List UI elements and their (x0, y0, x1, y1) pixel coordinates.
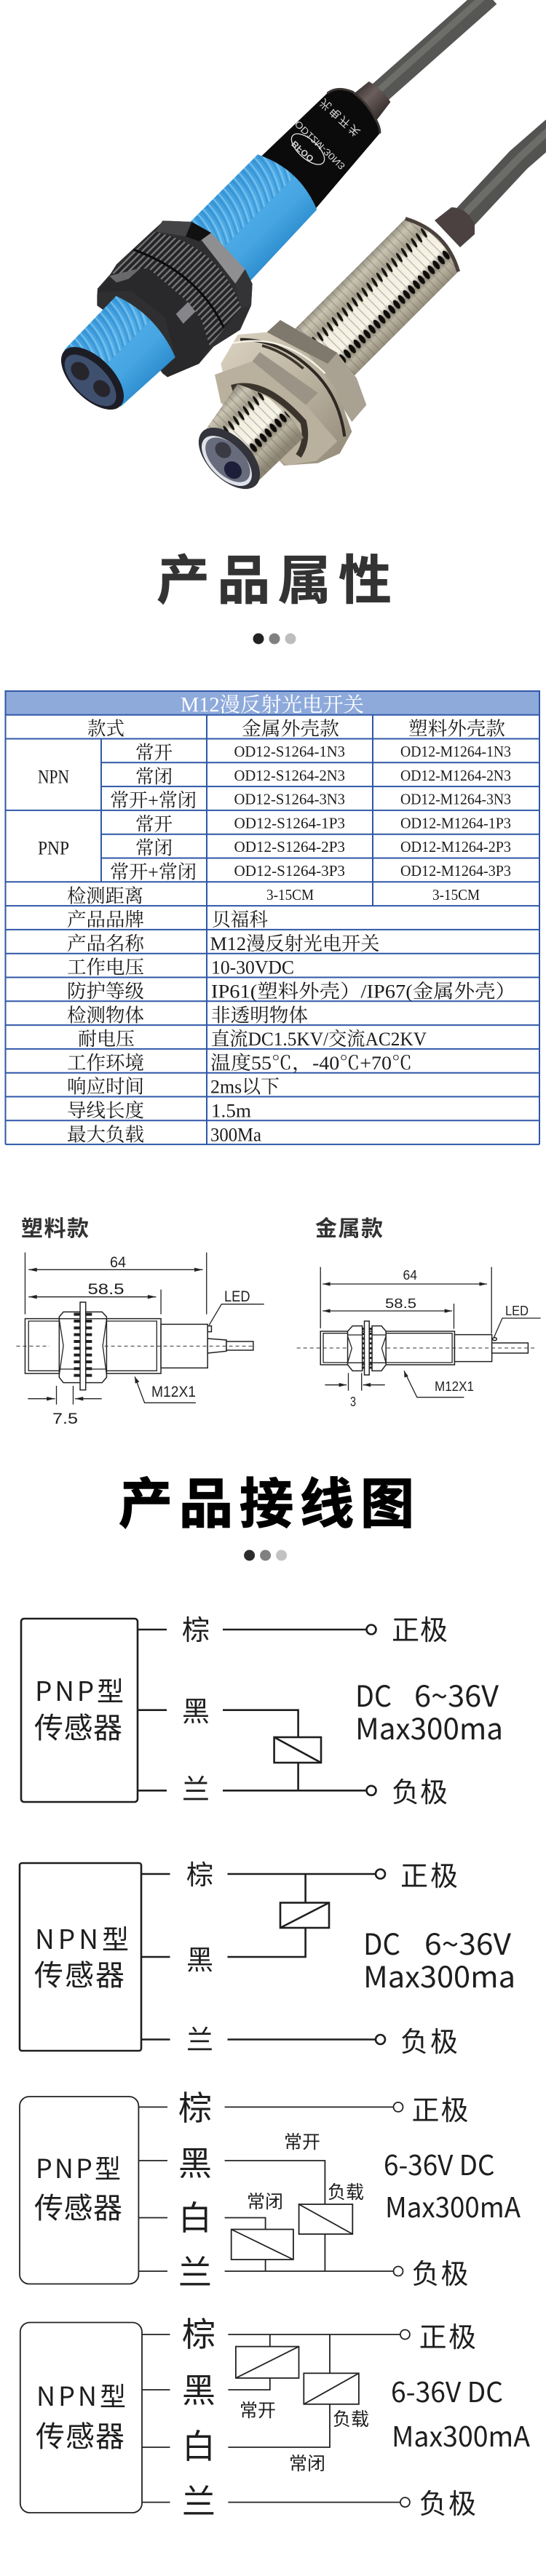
product photo: two M12 sensors (49, 0, 546, 500)
attribute rows: IP61(塑料外壳）/IP67(金属外壳） (211, 981, 516, 1002)
dimension drawing: metal: 64 (403, 1268, 417, 1283)
header row: 塑料外壳款 (408, 719, 505, 740)
header row (87, 719, 505, 740)
wiring diagram: PNP dual output: 传感器 (34, 2185, 122, 2227)
wiring diagram: PNP single output: 正极 (392, 1608, 448, 1648)
black cap marking text: OD12M-30N3 (293, 119, 347, 172)
lens of metal sensor (188, 417, 271, 500)
attribute rows (67, 885, 516, 1145)
dimension drawing: plastic: 64 (110, 1254, 126, 1271)
PNP rows: 常开 (135, 814, 173, 835)
wiring diagram: NPN dual output: 正极 (419, 2315, 476, 2355)
attribute rows: 2ms以下 (210, 1077, 280, 1098)
wiring diagram: NPN dual output (20, 2308, 530, 2524)
wiring diagram: PNP dual output: 正极 (412, 2088, 469, 2128)
PNP rows: OD12-M1264-2P3 (400, 838, 511, 856)
dimension drawing: plastic: LED (224, 1288, 250, 1305)
wiring diagram: PNP dual output: Max300mA (385, 2185, 521, 2225)
wiring diagram: NPN single output: 棕 (186, 1853, 213, 1892)
dimension label: metal: 金属款 (315, 1217, 383, 1241)
attribute rows: 工作电压 (67, 957, 144, 978)
dimension label: plastic: 塑料款 (21, 1217, 89, 1241)
attribute rows: 导线长度 (67, 1100, 144, 1122)
wiring diagram: PNP single output: DC (355, 1673, 392, 1715)
wiring diagram: NPN single output (20, 1853, 515, 2059)
dimension drawing: plastic: 7.5 (52, 1411, 78, 1427)
header row: 款式 (87, 719, 124, 740)
attribute rows: 10-30VDC (211, 957, 294, 978)
PNP rows (38, 814, 511, 883)
wiring diagram: PNP dual output: 负极 (412, 2252, 469, 2292)
PNP rows: 常开+常闭 (110, 861, 197, 883)
attribute rows: 产品品牌 (67, 909, 144, 930)
attribute rows: 检测距离 (67, 885, 143, 906)
wiring diagram: NPN single output: 传感器 (34, 1952, 124, 1994)
wiring diagram: PNP single output: 兰 (182, 1767, 210, 1807)
wiring diagram: PNP dual output: 白 (178, 2192, 212, 2240)
PNP rows: OD12-S1264-3P3 (234, 862, 345, 880)
specification table (6, 691, 539, 1145)
wiring diagram: NPN single output: DC (363, 1921, 400, 1963)
wiring diagram: NPN dual output: 常开 (240, 2396, 276, 2423)
wiring diagram: PNP single output (21, 1608, 503, 1810)
wiring diagram: PNP single output: 6~36V (414, 1673, 499, 1715)
NPN rows: 常开 (135, 742, 173, 764)
cable of blue sensor (368, 0, 489, 103)
wiring diagram: NPN dual output: 白 (182, 2420, 215, 2468)
wiring diagram: NPN dual output: 传感器 (36, 2413, 124, 2455)
blue plastic sensor (49, 0, 489, 423)
wiring diagram: PNP dual output: 兰 (178, 2246, 212, 2294)
attribute rows: 耐电压 (78, 1029, 135, 1050)
PNP rows: PNP (38, 838, 69, 858)
attribute rows: 最大负载 (67, 1124, 144, 1145)
wiring diagram: PNP single output: 传感器 (34, 1704, 122, 1747)
black nut (97, 220, 253, 377)
attribute rows: 3-15CM (432, 886, 480, 904)
wiring diagram: NPN dual output: 6-36V DC (391, 2370, 503, 2410)
wiring diagram: NPN dual output: 棕 (182, 2308, 215, 2356)
dimension drawing: metal: M12X1 (435, 1379, 474, 1394)
wiring diagram: NPN dual output: Max300mA (392, 2414, 530, 2455)
wiring diagram: NPN dual output: 常闭 (289, 2449, 325, 2476)
NPN rows: OD12-S1264-1N3 (234, 743, 345, 760)
attribute rows: 非透明物体 (211, 1005, 308, 1026)
wiring diagram: NPN single output: 负极 (400, 2019, 458, 2059)
attribute rows: 3-15CM (266, 886, 314, 904)
NPN rows: OD12-S1264-3N3 (234, 791, 345, 808)
wiring diagram: NPN single output: 正极 (400, 1854, 458, 1894)
wiring diagram: PNP dual output: 常闭 (247, 2188, 283, 2214)
NPN rows: 常开+常闭 (110, 790, 197, 811)
dimension drawing: metal: 3 (350, 1395, 356, 1409)
attribute rows: 防护等级 (67, 981, 144, 1002)
PNP rows: OD12-M1264-3P3 (400, 862, 511, 880)
wiring diagram: PNP dual output: 棕 (178, 2082, 212, 2130)
wiring diagram: PNP single output: 负极 (392, 1770, 448, 1810)
PNP rows: OD12-M1264-1P3 (400, 814, 511, 832)
table title band (6, 691, 539, 717)
PNP rows: 常闭 (135, 838, 173, 859)
wiring diagram: NPN single output: 兰 (186, 2018, 213, 2057)
wiring diagram: PNP dual output: 常开 (284, 2128, 320, 2154)
wiring diagram: NPN dual output: 黑 (182, 2364, 215, 2412)
dimension drawing: plastic: M12X1 (151, 1384, 196, 1400)
heading: wiring diagrams (119, 1474, 414, 1561)
wiring diagram: NPN single output: 黑 (186, 1938, 213, 1977)
wiring diagram: PNP dual output: 黑 (178, 2137, 212, 2185)
wiring diagram: PNP dual output: 6-36V DC (384, 2143, 495, 2183)
attribute rows: 300Ma (210, 1124, 261, 1145)
attribute rows: 1.5m (211, 1100, 251, 1122)
wiring diagram: NPN dual output: 兰 (182, 2476, 215, 2524)
wiring diagram: NPN dual output: 负极 (419, 2481, 476, 2521)
attribute rows: 响应时间 (67, 1077, 144, 1098)
NPN rows: OD12-M1264-2N3 (400, 767, 511, 784)
NPN rows: 常闭 (135, 766, 173, 787)
wiring diagram: PNP single output: Max300ma (355, 1706, 503, 1748)
dimension drawing: plastic: 58.5 (87, 1281, 124, 1298)
header row: 金属外壳款 (242, 719, 339, 740)
wiring diagram: PNP dual output (20, 2082, 521, 2294)
wiring diagram: PNP single output: PNP型 (35, 1670, 124, 1709)
dimension drawing: metal: 58.5 (385, 1296, 416, 1311)
black cap marking text: 光电开关 (317, 96, 363, 138)
cable of metal sensor (459, 116, 546, 224)
attribute rows: 工作环境 (67, 1053, 144, 1074)
wiring diagram: NPN single output: NPN型 (35, 1918, 129, 1957)
table title band: M12漫反射光电开关 (181, 693, 364, 717)
PNP rows: OD12-S1264-2P3 (234, 838, 345, 856)
NPN rows (38, 742, 511, 811)
NPN rows: OD12-M1264-1N3 (400, 743, 511, 760)
black cap marking text: BFOO (290, 139, 316, 164)
wiring diagram: PNP dual output: PNP型 (36, 2148, 121, 2186)
wiring diagram: PNP single output: 棕 (182, 1608, 210, 1648)
lens of blue sensor (50, 336, 135, 420)
wiring diagram: NPN dual output: 负载 (333, 2405, 369, 2431)
wiring diagram: NPN single output: Max300ma (363, 1954, 515, 1996)
attribute rows: 直流DC1.5KV/交流AC2KV (211, 1029, 427, 1050)
heading: wiring diagrams: 产品接线图 (119, 1474, 414, 1534)
dimension drawing: metal: LED (505, 1304, 529, 1318)
metal sensor (181, 116, 546, 500)
wiring diagram: NPN dual output: NPN型 (36, 2376, 126, 2414)
attribute rows: 贝福科 (212, 909, 268, 930)
wiring diagram: PNP dual output: 负载 (328, 2178, 364, 2204)
PNP rows: OD12-S1264-1P3 (234, 814, 345, 832)
NPN rows: OD12-S1264-2N3 (234, 767, 345, 784)
wiring diagram: NPN single output: 6~36V (424, 1921, 511, 1963)
attribute rows: 产品名称 (67, 933, 145, 954)
attribute rows: 检测物体 (67, 1005, 144, 1026)
dimension drawing: plastic (16, 1253, 264, 1427)
heading: product attributes: 产品属性 (157, 551, 392, 610)
black cap marking text (286, 96, 363, 172)
wiring diagram: PNP single output: 黑 (182, 1689, 210, 1729)
dimension drawing: metal (297, 1267, 541, 1409)
NPN rows: NPN (38, 767, 69, 787)
metal nuts and washer (215, 320, 366, 466)
attribute rows: 温度55℃，-40℃+70℃ (210, 1053, 412, 1074)
NPN rows: OD12-M1264-3N3 (400, 791, 511, 808)
heading: product attributes (157, 551, 392, 645)
attribute rows: M12漫反射光电开关 (210, 933, 380, 954)
